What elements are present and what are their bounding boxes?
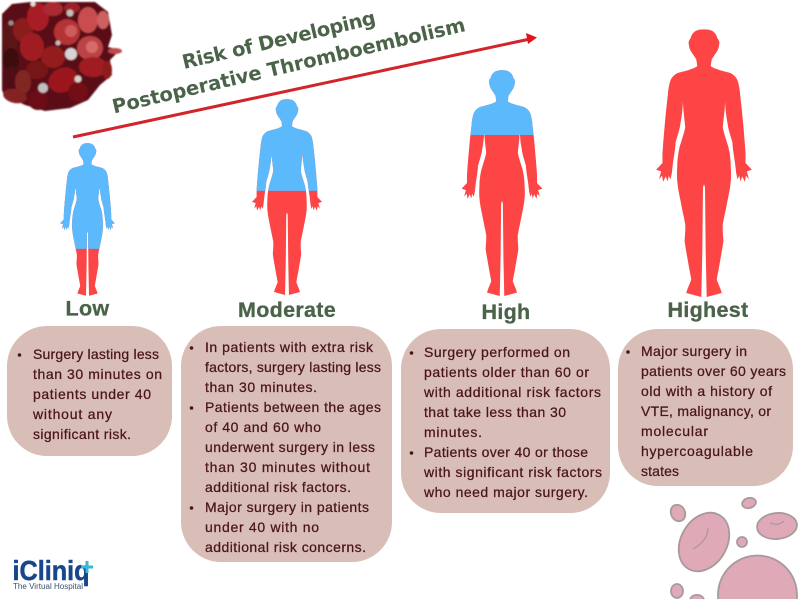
panel: low: patients under 40	[33, 386, 151, 402]
arrow: rising risk	[73, 33, 537, 137]
panel: high: that take less than 30	[424, 404, 566, 420]
panel: highest: hypercoagulable	[641, 443, 753, 459]
panel: moderate	[181, 326, 392, 562]
panel: moderate: underwent surgery in less	[205, 439, 375, 455]
panel: highest: states	[641, 463, 679, 479]
panel: low	[7, 326, 172, 456]
panel: high: Patients over 40 or those	[424, 444, 588, 460]
figure: moderate risk	[252, 99, 322, 295]
heading: low: Low	[66, 296, 109, 320]
panel: highest: Major surgery in	[641, 343, 747, 359]
panel: high: with additional risk factors	[423, 384, 601, 400]
figure: low risk	[60, 143, 115, 296]
panel: moderate: factors, surgery lasting less	[205, 359, 381, 375]
title: Risk of Developing	[180, 6, 378, 74]
panel: high: minutes.	[424, 424, 482, 440]
panel: moderate: In patients with extra risk	[205, 339, 374, 355]
heading: moderate: Moderate	[238, 298, 336, 322]
panel: high	[401, 329, 610, 513]
panel: moderate: additional risk factors.	[205, 479, 351, 495]
image: blood clot cells	[2, 2, 122, 111]
panel: moderate: of 40 and 60 who	[205, 419, 321, 435]
panel: highest: molecular	[641, 423, 708, 439]
panel: high: who need major surgery.	[423, 484, 588, 500]
figure: highest risk	[656, 29, 752, 297]
logo: iCliniq: iCliniq	[12, 555, 90, 586]
panel: moderate: Patients between the ages	[205, 399, 381, 415]
panel: high: patients older than 60 or	[424, 364, 589, 380]
panel: low: Surgery lasting less	[33, 346, 159, 362]
title: Postoperative Thromboembolism	[110, 13, 468, 118]
heading: highest: Highest	[668, 298, 748, 322]
panel: high: with significant risk factors	[423, 464, 602, 480]
panel: high: Surgery performed on	[424, 344, 570, 360]
panel: moderate: additional risk concerns.	[205, 539, 366, 555]
panel: highest: old with a history of	[641, 383, 772, 399]
panel: moderate: Major surgery in patients	[205, 499, 369, 515]
logo: iCliniq: The Virtual Hospital	[13, 582, 83, 591]
figure: high risk	[462, 70, 542, 296]
heading: high: High	[482, 300, 530, 324]
panel: highest	[618, 329, 793, 486]
panel: moderate: than 30 minutes.	[205, 379, 317, 395]
panel: moderate: under 40 with no	[205, 519, 319, 535]
panel: low: significant risk.	[33, 426, 131, 442]
panel: moderate: than 30 minutes without	[205, 459, 370, 475]
decoration: red blood cells	[668, 496, 798, 599]
panel: low: without any	[32, 406, 112, 422]
panel: low: than 30 minutes on	[33, 366, 162, 382]
panel: highest: VTE, malignancy, or	[641, 403, 771, 419]
panel: highest: patients over 60 years	[641, 363, 786, 379]
